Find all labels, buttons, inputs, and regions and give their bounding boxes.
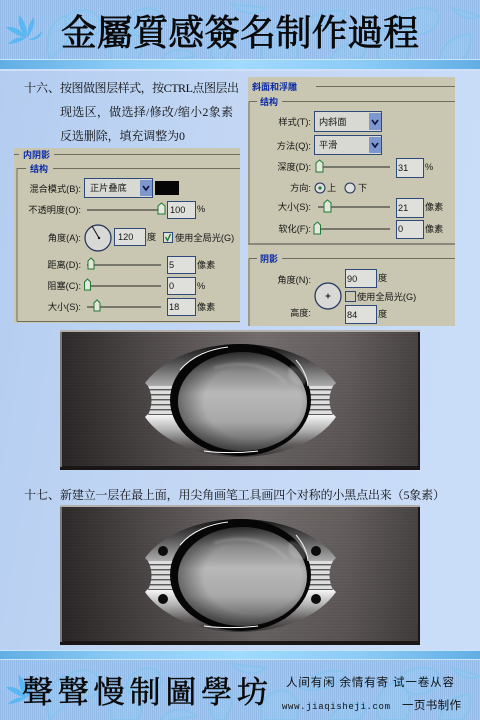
shading angle and altitude controls <box>277 270 416 324</box>
shading angle and altitude controls: 84 <box>347 310 357 320</box>
direction row: 方向: <box>290 182 311 193</box>
panel: inner shadow settings <box>14 148 240 323</box>
soften row <box>278 220 443 238</box>
style row <box>278 112 382 132</box>
step 16 instructions: 现选区，做选择/修改/缩小2象素 <box>60 104 233 119</box>
shading angle and altitude controls: 度 <box>378 308 387 319</box>
shading angle and altitude controls: 度 <box>378 272 387 283</box>
shading angle and altitude controls: 角度(N): <box>277 274 311 285</box>
direction row: 下 <box>358 183 367 193</box>
style row: 样式(T): <box>278 116 311 127</box>
distance row <box>47 256 215 274</box>
blend mode row: 混合模式(B): <box>29 183 81 194</box>
size row: 大小(S): <box>278 201 311 212</box>
heading: structure: 结构 <box>30 163 48 174</box>
opacity row: % <box>197 204 205 214</box>
step 16 instructions <box>24 80 239 143</box>
method row <box>277 136 382 154</box>
style row: 内斜面 <box>319 116 347 127</box>
title: 金屬質感簽名制作過程 <box>61 13 419 53</box>
shading angle and altitude controls: 90 <box>347 274 357 284</box>
size row <box>278 198 443 218</box>
header banner <box>0 0 480 71</box>
choke row: 0 <box>169 281 174 291</box>
opacity row: 不透明度(O): <box>28 204 81 215</box>
opacity row: 100 <box>170 205 185 215</box>
step 17 instructions: 新建立一层在最上面，用尖角画笔工具画四个对称的小黑点出来（5象素） <box>60 487 445 502</box>
choke row: % <box>197 281 205 291</box>
distance row: 距离(D): <box>47 259 81 270</box>
footer website: www.jiaqisheji.com <box>282 702 390 712</box>
direction row: 上 <box>327 183 336 193</box>
blend mode row <box>29 178 179 198</box>
depth row: 深度(D): <box>277 161 311 172</box>
icon: four black dots <box>158 546 321 604</box>
footer credit: 一页书制作 <box>402 699 462 712</box>
heading: inner shadow: 内阴影 <box>23 149 50 160</box>
angle row: 使用全局光(G) <box>175 232 234 243</box>
blend mode row: 正片叠底 <box>90 182 127 193</box>
footer motto: 人间有闲 余情有寄 试一卷从容 <box>286 675 454 689</box>
method row: 平滑 <box>319 140 337 150</box>
heading: bevel and emboss: 斜面和浮雕 <box>252 81 297 92</box>
size row: 像素 <box>425 201 443 212</box>
step 17 instructions: 十七、 <box>24 487 60 502</box>
depth row <box>277 158 433 178</box>
angle row: 120 <box>118 232 133 242</box>
footer banner <box>0 650 480 720</box>
depth row: 31 <box>398 163 408 173</box>
metal badge image: step 16 result <box>60 330 420 470</box>
angle row <box>48 225 234 251</box>
distance row: 5 <box>169 260 174 270</box>
soften row: 像素 <box>425 223 443 234</box>
size row: 像素 <box>197 301 215 312</box>
heading: shading: 阴影 <box>260 253 278 264</box>
soften row: 0 <box>398 224 403 234</box>
choke row: 阻塞(C): <box>47 280 81 291</box>
shading angle and altitude controls: 使用全局光(G) <box>357 291 416 302</box>
opacity row <box>28 202 205 218</box>
step 16 instructions: 反选删除，填充调整为0 <box>60 128 185 143</box>
depth row: % <box>425 162 433 172</box>
angle row: 角度(A): <box>48 232 81 243</box>
method row: 方法(Q): <box>277 140 311 151</box>
step 16 instructions: 按图做图层样式，按CTRL点图层出 <box>60 80 239 95</box>
size row <box>48 298 215 316</box>
metal badge image: step 17 result with four black dots <box>60 505 420 645</box>
panel: bevel and emboss settings <box>248 77 455 326</box>
shading angle and altitude controls: 高度: <box>290 307 311 318</box>
size row: 大小(S): <box>48 301 81 312</box>
footer studio name: 聲聲慢制圖學坊 <box>22 675 268 710</box>
distance row: 像素 <box>197 259 215 270</box>
size row: 21 <box>398 203 408 213</box>
direction row <box>290 182 367 193</box>
heading: structure: 结构 <box>260 96 278 107</box>
step 16 instructions: 十六、 <box>24 80 60 95</box>
soften row: 软化(F): <box>278 223 311 234</box>
size row: 18 <box>169 302 179 312</box>
angle row: 度 <box>147 231 156 242</box>
choke row <box>47 278 205 294</box>
